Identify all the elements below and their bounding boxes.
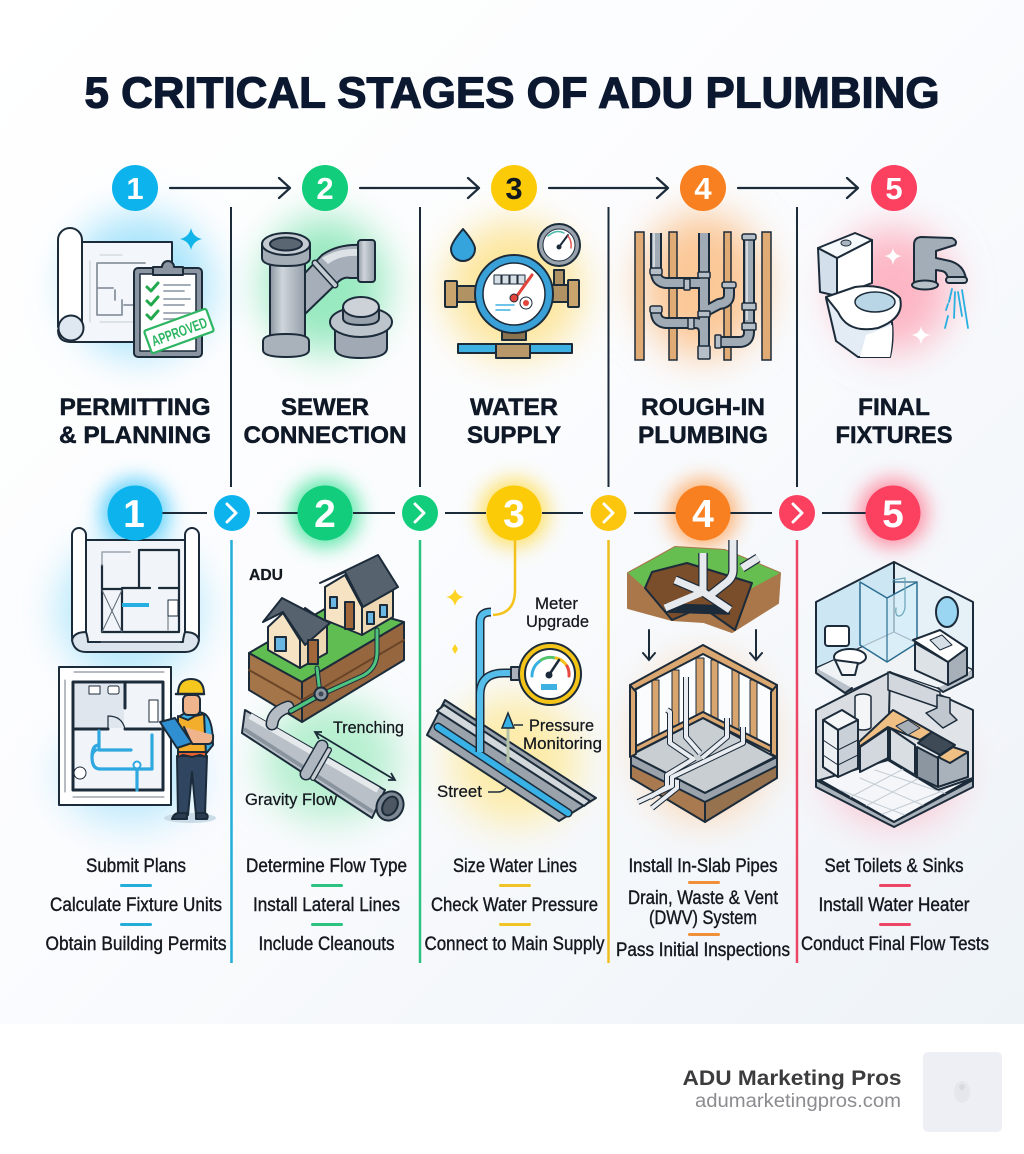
label: meter upgrade: Upgrade	[526, 613, 589, 631]
checklist: stage 3 steps	[424, 855, 605, 955]
step badge 5	[866, 486, 920, 540]
checklist: stage 4 steps: Drain, Waste & Vent	[628, 887, 778, 909]
checklist: stage 4 steps: (DWV) System	[649, 907, 757, 929]
checklist: stage 1 steps	[46, 855, 227, 955]
top flow: arrows between steps	[170, 178, 858, 198]
step badge 4	[676, 486, 730, 540]
illustration: bathroom isometric	[816, 562, 973, 693]
step badge 3	[491, 165, 537, 211]
checklist: stage 2 steps: Install Lateral Lines	[253, 894, 400, 916]
label: gravity flow: Gravity Flow	[245, 791, 337, 809]
step badge 1	[108, 486, 162, 540]
icon: floor plan with pipe layout	[59, 667, 171, 805]
arrows: down to slab	[643, 630, 762, 660]
heading: rough-in plumbing: PLUMBING	[638, 422, 768, 449]
heading: rough-in plumbing	[638, 394, 768, 449]
icon: toilet and faucet	[818, 233, 968, 357]
checklist: stage 4 steps: Install In-Slab Pipes	[628, 855, 778, 877]
step badge 2: 2	[316, 171, 334, 206]
step badge 2	[302, 165, 348, 211]
illustration: riser pipes	[480, 612, 512, 752]
illustration: street with water main	[427, 700, 596, 821]
heading: water supply: SUPPLY	[467, 422, 561, 449]
heading: final fixtures	[836, 394, 952, 449]
checklist: stage 3 steps: Check Water Pressure	[431, 894, 598, 916]
checklist: stage 5 steps: Set Toilets & Sinks	[824, 855, 964, 877]
heading: sewer connection: CONNECTION	[244, 422, 406, 449]
step badge 5	[871, 165, 917, 211]
icon: sparkles	[446, 589, 464, 654]
icon: sewer pipe fitting and cap	[262, 233, 392, 358]
checklist: stage 5 steps: Install Water Heater	[818, 894, 970, 916]
panel: sewer connection overview	[244, 165, 406, 449]
checklist: stage 4 steps	[616, 855, 790, 961]
heading: rough-in plumbing: ROUGH-IN	[641, 394, 765, 421]
brand name: ADU Marketing Pros	[682, 1066, 902, 1090]
step badge 3	[486, 486, 542, 540]
panel: water supply overview	[445, 165, 580, 449]
panel: stage 4 detail	[616, 486, 790, 961]
illustration: sewer main pipe	[242, 688, 409, 825]
coloured column dividers	[232, 540, 797, 963]
icon: sparkles	[884, 248, 931, 345]
icon: pipes routed through wall studs	[635, 232, 771, 360]
heading: final fixtures: FINAL	[858, 394, 930, 421]
panel: final fixtures overview	[818, 165, 968, 449]
checklist: stage 1 steps: Obtain Building Permits	[46, 933, 227, 955]
panel: stage 3 detail	[424, 486, 605, 955]
illustration: trench with underground pipes	[628, 540, 780, 632]
heading: sewer connection	[244, 394, 406, 449]
label: pressure monitoring: Pressure	[529, 717, 594, 735]
panel: stage 5 detail	[801, 486, 989, 955]
heading: water supply: WATER	[470, 394, 558, 421]
icon: pressure gauge	[511, 643, 581, 705]
step badge 1	[112, 165, 158, 211]
panel: stage 2 detail	[242, 486, 409, 955]
footer branding	[682, 1052, 1002, 1132]
step badge 1: 1	[126, 171, 144, 206]
checklist: stage 2 steps: Include Cleanouts	[258, 933, 395, 955]
icon: sparkle	[180, 228, 202, 250]
panel: permitting and planning overview	[58, 165, 214, 449]
label: meter upgrade	[526, 595, 589, 631]
label: pressure monitoring	[523, 717, 602, 753]
step badge 2	[298, 486, 352, 540]
illustration: framed walls with slab plumbing	[630, 645, 777, 822]
checklist: stage 3 steps: Size Water Lines	[453, 855, 577, 877]
step badge 5: 5	[885, 171, 903, 206]
illustration: ADU and main house on lot	[249, 555, 404, 722]
arrow: trench span	[315, 732, 395, 780]
brand url: adumarketingpros.com	[695, 1091, 901, 1112]
top dividers	[231, 207, 797, 487]
checklist: stage 3 steps: Connect to Main Supply	[424, 933, 605, 955]
label: street	[437, 783, 506, 801]
checklist: stage 2 steps: Determine Flow Type	[246, 855, 407, 877]
label: meter upgrade: Meter	[535, 595, 579, 613]
heading: permitting and planning: & PLANNING	[59, 422, 211, 449]
heading: water supply	[467, 394, 561, 449]
heading: final fixtures: FIXTURES	[836, 422, 952, 449]
step badge 3: 3	[505, 171, 523, 206]
step badge 1: 1	[123, 493, 145, 536]
arrow: pressure monitoring up	[502, 713, 523, 763]
step badge 4	[680, 165, 726, 211]
checklist: stage 1 steps: Calculate Fixture Units	[50, 894, 222, 916]
chevron connector badges	[214, 495, 815, 531]
heading: permitting and planning	[59, 394, 211, 449]
icon: blueprint sheet	[72, 528, 199, 652]
title: 5 CRITICAL STAGES OF ADU PLUMBING	[84, 68, 940, 118]
connector: yellow lead line	[493, 538, 515, 615]
step badge 3: 3	[503, 493, 525, 536]
checklist: stage 4 steps: Pass Initial Inspections	[616, 939, 790, 961]
checklist: stage 1 steps: Submit Plans	[86, 855, 186, 877]
checklist: stage 2 steps	[246, 855, 407, 955]
step badge 2: 2	[314, 493, 336, 536]
heading: permitting and planning: PERMITTING	[60, 394, 210, 421]
heading: sewer connection: SEWER	[281, 394, 369, 421]
step badge 5: 5	[882, 493, 904, 536]
checklist: stage 5 steps: Conduct Final Flow Tests	[801, 933, 989, 955]
panel: stage 1 detail	[46, 486, 227, 955]
icon: blueprint with approved clipboard	[58, 228, 214, 357]
icon: blueprint with approved clipboard: APPROVED	[149, 314, 210, 350]
logo placeholder	[923, 1052, 1002, 1132]
step badge 4: 4	[694, 171, 712, 206]
panel: rough-in plumbing overview	[635, 165, 771, 449]
label: street: Street	[437, 783, 482, 801]
label: ADU: ADU	[249, 567, 283, 584]
checklist: stage 5 steps	[801, 855, 989, 955]
label: pressure monitoring: Monitoring	[523, 735, 602, 753]
icon: worker with clipboard	[160, 679, 216, 823]
step badge 4: 4	[692, 493, 714, 536]
lower flow connector lines	[162, 512, 866, 514]
icon: water meter with gauge and drop	[445, 224, 580, 358]
illustration: kitchen isometric	[816, 672, 973, 827]
label: trenching: Trenching	[333, 719, 404, 737]
